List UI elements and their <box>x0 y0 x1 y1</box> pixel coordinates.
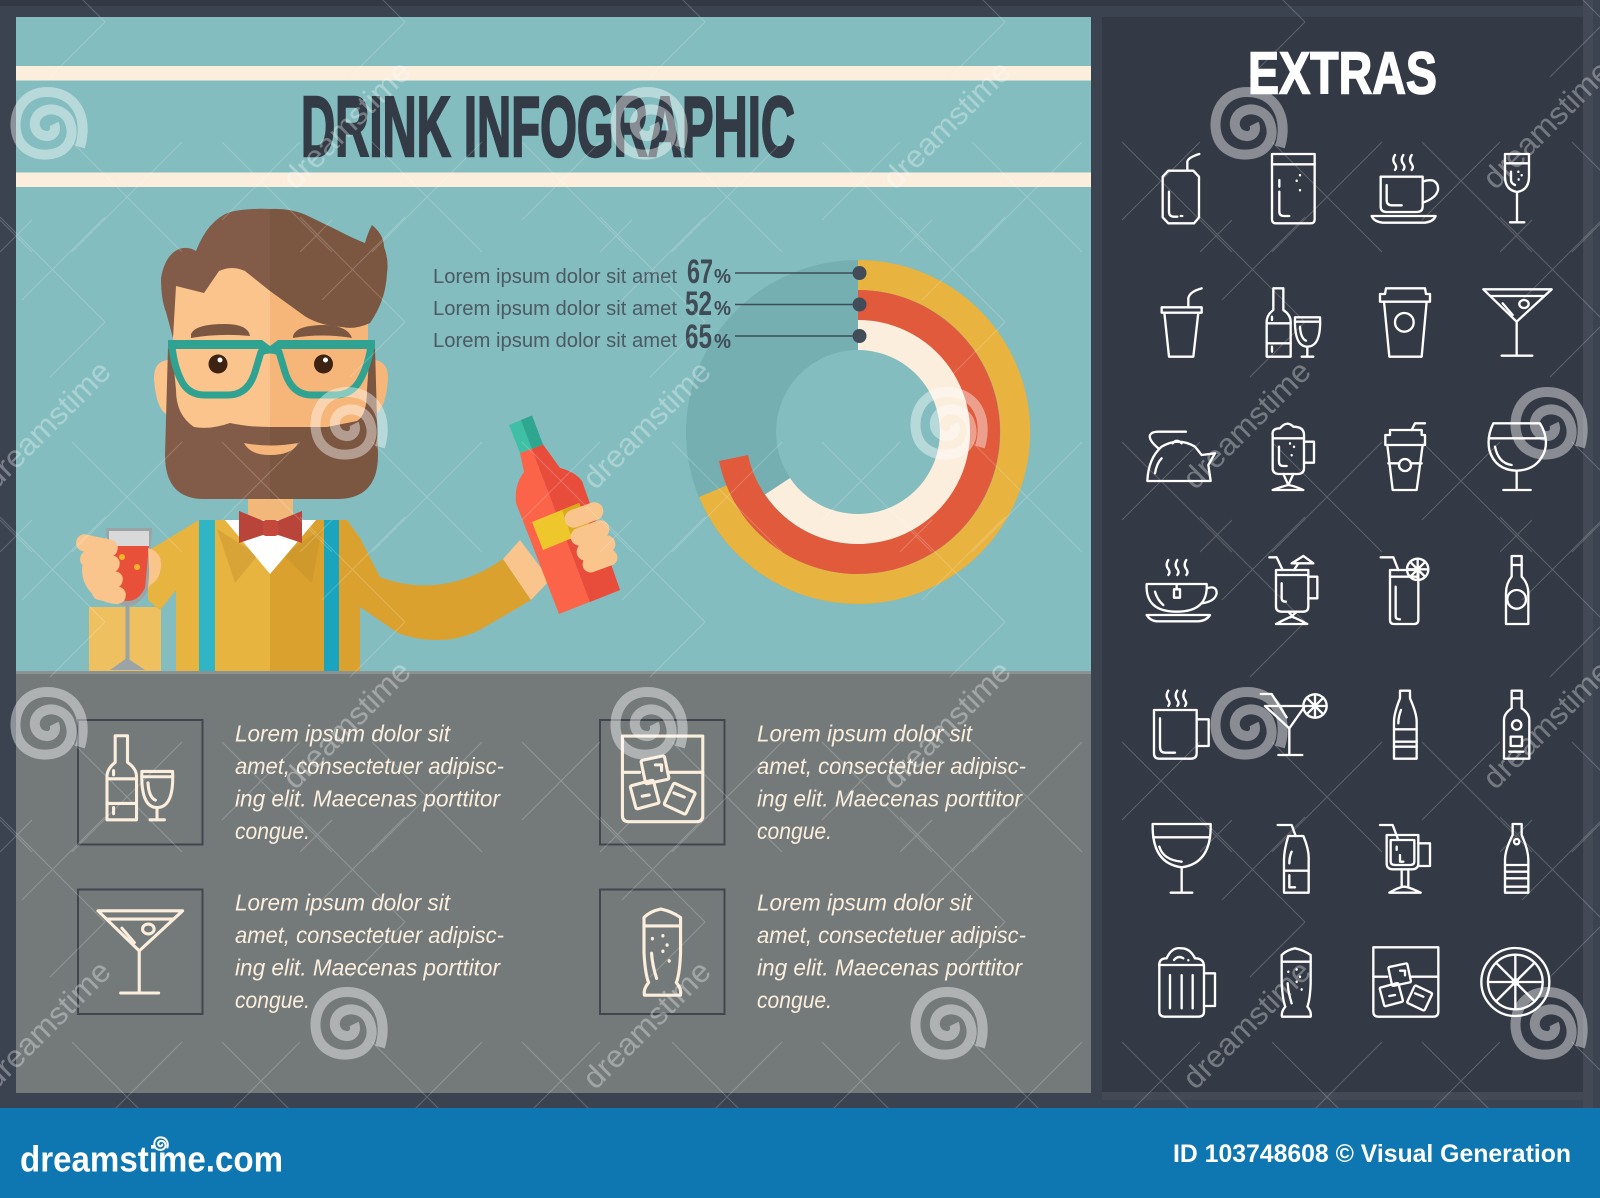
face <box>172 262 270 440</box>
text: martini: ing elit. Maecenas porttitor <box>235 954 501 980</box>
watermark text: dreamstime <box>876 654 1018 796</box>
chart legend: Lorem ipsum dolor sit amet <box>433 266 677 288</box>
icon: coffee cup with saucer <box>1372 155 1438 223</box>
palm <box>82 536 154 604</box>
chart legend: 67 <box>687 253 713 291</box>
watermark spirals <box>15 92 1583 1055</box>
arc: 52% red <box>719 290 1000 574</box>
glasses <box>168 340 375 395</box>
icon: can with straw <box>1163 154 1199 223</box>
text: wine: Lorem ipsum dolor sit <box>235 720 452 746</box>
icon: takeaway coffee <box>1380 288 1430 357</box>
icon: cocktail with lime <box>1261 694 1327 755</box>
heading: extras: EXTRAS <box>1248 40 1437 106</box>
connector lines and dots <box>735 266 866 343</box>
text: beer: ing elit. Maecenas porttitor <box>757 954 1023 980</box>
feature: martini <box>78 890 504 1014</box>
icon: champagne bottle <box>1505 824 1528 893</box>
icon box: wine <box>78 720 202 844</box>
text: whisky: congue. <box>757 818 832 844</box>
panel: main infographic <box>16 17 1091 1093</box>
panel: feature list <box>78 720 1026 1014</box>
text: martini: amet, consectetuer adipisc- <box>235 922 504 948</box>
text: whisky: ing elit. Maecenas porttitor <box>757 786 1023 812</box>
radial bar chart <box>699 260 1030 604</box>
text: wine: ing elit. Maecenas porttitor <box>235 786 501 812</box>
text: martini: congue. <box>235 987 310 1013</box>
icon box: beer <box>600 890 724 1014</box>
icon grid: rows one to four <box>1147 154 1552 624</box>
text: wine <box>235 720 504 844</box>
watermark text: dreamstime <box>276 654 418 796</box>
footer band <box>0 1108 1600 1198</box>
right hand fingers <box>562 500 620 575</box>
icon: beer mug <box>1159 948 1215 1017</box>
watermark text: dreamstime <box>1176 354 1318 496</box>
feature: beer <box>600 890 1026 1014</box>
left hand <box>148 548 161 585</box>
icon: steaming mug <box>1154 691 1209 759</box>
icon box: whisky <box>600 720 724 844</box>
chart legend: 52 <box>685 285 712 323</box>
feature: wine <box>78 720 504 844</box>
text: whisky: Lorem ipsum dolor sit <box>757 720 974 746</box>
wine glass in hand <box>126 600 130 660</box>
left forearm <box>89 607 161 671</box>
icon: balloon glass <box>1489 423 1546 490</box>
text: wine: amet, consectetuer adipisc- <box>235 753 504 779</box>
bow tie <box>239 511 266 543</box>
neck <box>248 495 293 525</box>
hair <box>161 209 270 338</box>
watermark text: dreamstime <box>576 954 718 1096</box>
mouth <box>244 443 298 455</box>
text: beer: Lorem ipsum dolor sit <box>757 890 974 916</box>
icon: mug with straw <box>1380 825 1430 893</box>
text: whisky <box>757 720 1026 844</box>
icon: wine glass <box>1153 824 1211 893</box>
icon: kettle <box>1147 432 1215 481</box>
bottle <box>516 444 620 614</box>
text: beer: amet, consectetuer adipisc- <box>757 922 1026 948</box>
arc: 67% yellow <box>699 260 1030 604</box>
feature: whisky <box>600 720 1026 844</box>
chart legend: % <box>714 266 731 288</box>
icon: tea cup with bag <box>1147 560 1217 621</box>
chart legend: 65 <box>685 318 712 356</box>
arc: 65% cream <box>765 320 970 544</box>
eyes <box>208 354 228 374</box>
icon: tall beer glass <box>1282 948 1311 1017</box>
footer logo: dreamstime.com <box>20 1138 283 1180</box>
beard <box>165 347 270 499</box>
chart legend: % <box>714 298 731 320</box>
text: martini <box>235 890 504 1013</box>
title: DRINK INFOGRAPHIC <box>301 80 795 175</box>
right hand wrist <box>503 540 550 600</box>
chart track <box>731 305 985 559</box>
icon: cup with lid and straw <box>1385 423 1425 490</box>
watermark text: dreamstime <box>276 54 418 196</box>
icon: long drink with citrus <box>1381 557 1428 624</box>
chart legend: Lorem ipsum dolor sit amet <box>433 298 677 320</box>
eyebrows <box>191 324 250 338</box>
icon: glass with ice <box>1373 947 1438 1017</box>
text: whisky: amet, consectetuer adipisc- <box>757 753 1026 779</box>
suspenders <box>199 520 215 671</box>
icon: paper cup with straw <box>1162 288 1202 357</box>
chart legend: Lorem ipsum dolor sit amet <box>433 330 677 352</box>
title band <box>16 66 1091 187</box>
text: beer: congue. <box>757 987 832 1013</box>
icon: martini <box>1483 289 1552 356</box>
icon: cocktail mug with umbrella <box>1269 556 1317 624</box>
chart legend: % <box>714 331 731 353</box>
illustration: hipster bartender <box>75 209 620 671</box>
watermark text: dreamstime <box>576 354 718 496</box>
icon grid: rows five to seven <box>1153 691 1549 1017</box>
text: wine: congue. <box>235 818 310 844</box>
icon: bottle and wine glass <box>1267 288 1320 357</box>
jacket <box>148 520 531 671</box>
shirt <box>225 520 316 574</box>
icon: glass of water <box>1272 154 1315 223</box>
icon: glass bottle <box>1394 691 1417 759</box>
icon: beer bottle <box>1506 556 1528 624</box>
icon: champagne flute <box>1505 154 1529 222</box>
icon: bottle with straw <box>1278 825 1309 893</box>
icon box: martini <box>78 890 202 1014</box>
ears <box>154 360 170 416</box>
icon: liquor bottle <box>1504 691 1529 759</box>
watermark text: dreamstime <box>1176 954 1318 1096</box>
text: beer <box>757 890 1026 1013</box>
text: martini: Lorem ipsum dolor sit <box>235 890 452 916</box>
chart legend <box>433 253 731 356</box>
icon: citrus slice <box>1481 948 1549 1016</box>
icon: foam mug <box>1273 424 1314 490</box>
footer credit: ID 103748608 © Visual Generation <box>1173 1140 1571 1168</box>
watermark text: dreamstime <box>876 54 1018 196</box>
